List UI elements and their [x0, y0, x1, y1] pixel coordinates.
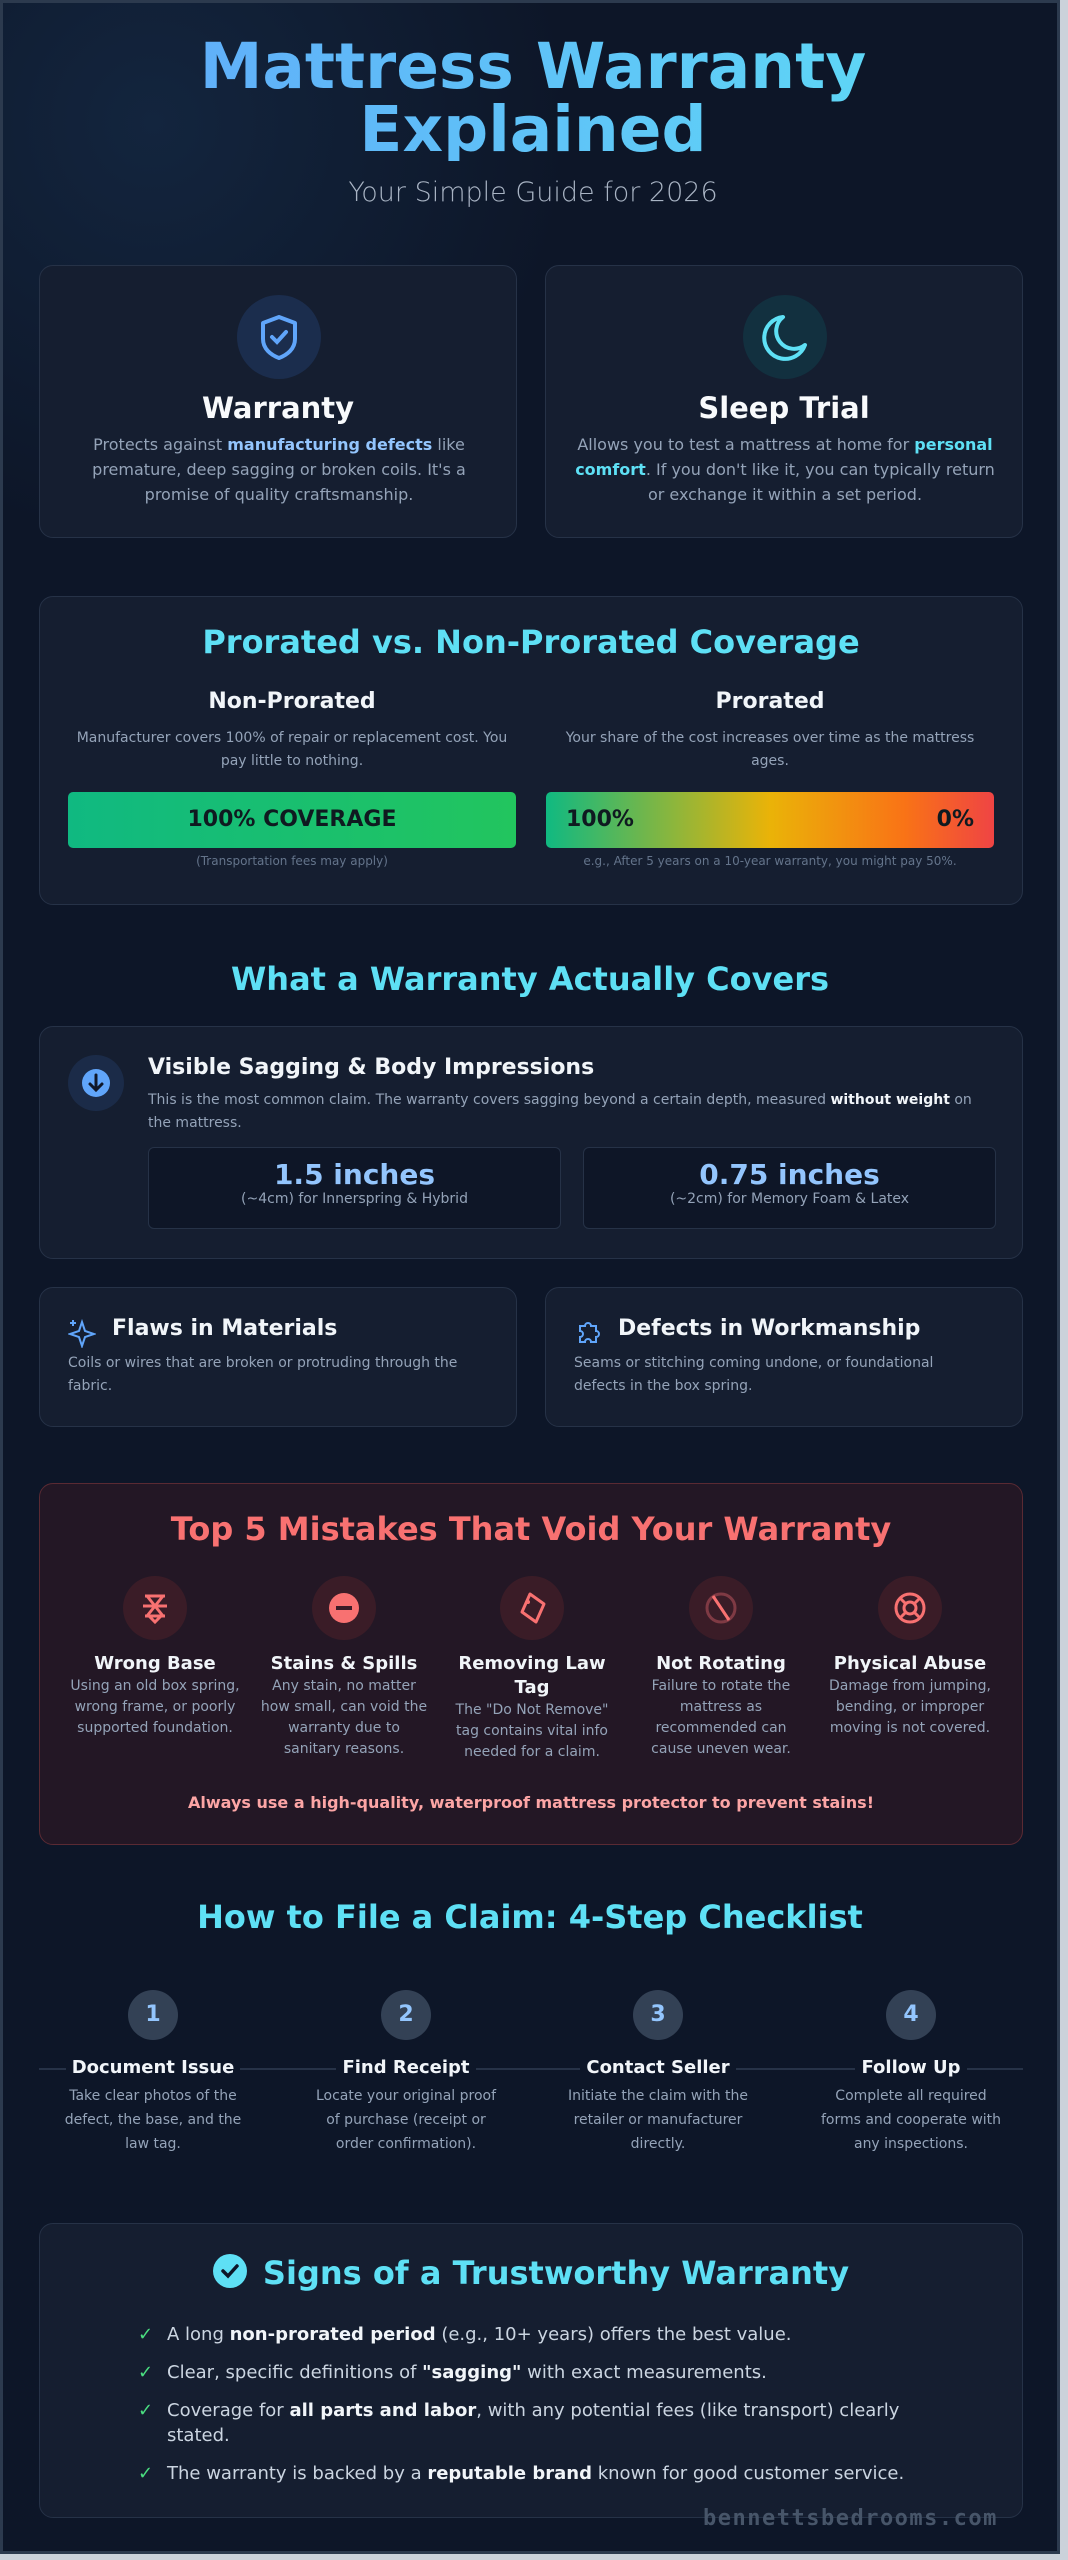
step 2: Find Receipt: [342, 2057, 470, 2078]
step 4: [821, 1990, 1001, 2152]
non-prorated column: (Transportation fees may apply): [196, 854, 388, 868]
stat: 0.75 inches: 0.75 inches: [699, 1158, 880, 1191]
non-prorated column: [68, 689, 516, 868]
callout: Always use a high-quality, waterproof mattress protector to prevent stains!: [188, 1793, 874, 1812]
stat: 1.5 inches: [148, 1147, 561, 1229]
prorated column: [546, 689, 994, 868]
heading: Sleep Trial: [698, 391, 870, 425]
mistake: law tag: The "Do Not Remove" tag contains vital info needed for a claim.: [456, 1702, 608, 1760]
text: This is the most common claim. The warranty covers sagging beyond a certain depth, measured without weight on the mattress.: [148, 1092, 972, 1131]
mistake: wrong base: [70, 1576, 240, 1736]
panel: flaws in materials: [39, 1287, 517, 1427]
step 4: Follow Up: [861, 2057, 961, 2078]
title: Explained: [359, 93, 707, 166]
mistake: law tag: Removing Law Tag: [458, 1653, 606, 1698]
non-prorated column: Non-Prorated: [208, 689, 376, 714]
mistake: physical abuse: [829, 1576, 991, 1736]
step 4: 4: [903, 2002, 919, 2027]
icon: moon: [743, 295, 827, 379]
prorated column: e.g., After 5 years on a 10-year warranty, you might pay 50%.: [583, 854, 957, 868]
checklist: ✓: [138, 2362, 153, 2383]
heading: what covers: What a Warranty Actually Covers: [231, 960, 829, 998]
mistake: stains: [261, 1576, 427, 1757]
checklist: ✓: [138, 2400, 153, 2421]
checklist: Coverage for all parts and labor, with any potential fees (like transport) clearly stated.: [167, 2400, 899, 2446]
mistake: wrong base: Wrong Base: [94, 1653, 216, 1674]
stat: 0.75 inches: [583, 1147, 996, 1229]
mistake: not rotating: Failure to rotate the mattress as recommended can cause uneven wear.: [651, 1678, 791, 1757]
heading: Warranty: [202, 391, 354, 425]
title: [3, 35, 1063, 161]
heading: Prorated vs. Non-Prorated Coverage: [202, 623, 860, 661]
panel: warranty: [39, 265, 517, 538]
heading: Signs of a Trustworthy Warranty: [263, 2254, 849, 2292]
step 2: [316, 1990, 496, 2152]
step 3: 3: [650, 2002, 666, 2027]
bar: gradient: 0%: [937, 807, 974, 832]
mistake: physical abuse: Damage from jumping, bending, or improper moving is not covered.: [829, 1678, 991, 1736]
prorated column: Prorated: [716, 689, 824, 714]
heading: claim: How to File a Claim: 4-Step Checklist: [197, 1898, 863, 1936]
bar: 100% coverage: 100% COVERAGE: [188, 807, 396, 832]
prorated column: Your share of the cost increases over time as the mattress ages.: [566, 730, 974, 769]
checklist: [138, 2324, 904, 2484]
panel: top 5 mistakes: [39, 1483, 1023, 1845]
step 3: Initiate the claim with the retailer or manufacturer directly.: [568, 2088, 748, 2152]
panel: sleep trial: [545, 265, 1023, 538]
mistake: stains: Any stain, no matter how small, can void the warranty due to sanitary reasons.: [261, 1678, 427, 1757]
title: Mattress Warranty: [200, 30, 866, 103]
step 3: [568, 1990, 748, 2152]
mistake: physical abuse: Physical Abuse: [834, 1653, 986, 1674]
icon: sparkle: [68, 1319, 96, 1348]
non-prorated column: Manufacturer covers 100% of repair or replacement cost. You pay little to nothing.: [77, 730, 507, 769]
step 2: 2: [398, 2002, 414, 2027]
mistake: law tag: [455, 1576, 608, 1760]
text: Coils or wires that are broken or protruding through the fabric.: [68, 1355, 457, 1394]
stat: 0.75 inches: (~2cm) for Memory Foam & Latex: [670, 1191, 909, 1207]
panel: trustworthy signs: [39, 2223, 1023, 2518]
icon: down arrow: [68, 1055, 124, 1111]
checklist: Clear, specific definitions of "sagging" with exact measurements.: [167, 2362, 767, 2383]
step 1: 1: [145, 2002, 161, 2027]
checklist: ✓: [138, 2324, 153, 2345]
heading: Visible Sagging & Body Impressions: [148, 1055, 594, 1080]
stat: 1.5 inches: 1.5 inches: [274, 1158, 435, 1191]
bar: 100% coverage: [68, 792, 516, 848]
subtitle: Your Simple Guide for 2026: [348, 177, 718, 208]
step 2: Locate your original proof of purchase (receipt or order confirmation).: [316, 2088, 496, 2152]
step 1: Document Issue: [72, 2057, 234, 2078]
checklist: A long non-prorated period (e.g., 10+ years) offers the best value.: [167, 2324, 792, 2345]
stat: 1.5 inches: (~4cm) for Innerspring & Hybrid: [241, 1191, 468, 1207]
bar: gradient: [546, 792, 994, 848]
panel: prorated: [39, 596, 1023, 905]
mistake: wrong base: Using an old box spring, wrong frame, or poorly supported foundation.: [70, 1678, 240, 1736]
icon: shield: [237, 295, 321, 379]
heading: Flaws in Materials: [112, 1316, 337, 1341]
checklist: ✓: [138, 2463, 153, 2484]
mistake: not rotating: Not Rotating: [656, 1653, 786, 1674]
checklist: The warranty is backed by a reputable brand known for good customer service.: [167, 2463, 904, 2484]
watermark: bennettsbedrooms.com: [703, 2506, 998, 2531]
heading: Top 5 Mistakes That Void Your Warranty: [171, 1510, 891, 1548]
step 1: Take clear photos of the defect, the base, and the law tag.: [65, 2088, 241, 2152]
heading: Defects in Workmanship: [618, 1316, 920, 1341]
bar: gradient: 100%: [566, 807, 634, 832]
mistake: not rotating: [651, 1576, 791, 1757]
step 1: [65, 1990, 241, 2152]
panel: sagging: [39, 1026, 1023, 1259]
text: Seams or stitching coming undone, or foundational defects in the box spring.: [574, 1355, 933, 1394]
panel: defects in workmanship: [545, 1287, 1023, 1427]
mistake: stains: Stains & Spills: [271, 1653, 417, 1674]
text block: Protects against manufacturing defects like premature, deep sagging or broken coils. It's a promise of quality craftsmanship.: [92, 435, 466, 504]
icon: puzzle: [579, 1322, 600, 1343]
step 3: Contact Seller: [586, 2057, 730, 2078]
step 4: Complete all required forms and cooperate with any inspections.: [821, 2088, 1001, 2152]
text block: Allows you to test a mattress at home for personal comfort. If you don't like it, you can typically return or exchange it within a set period.: [575, 435, 995, 504]
